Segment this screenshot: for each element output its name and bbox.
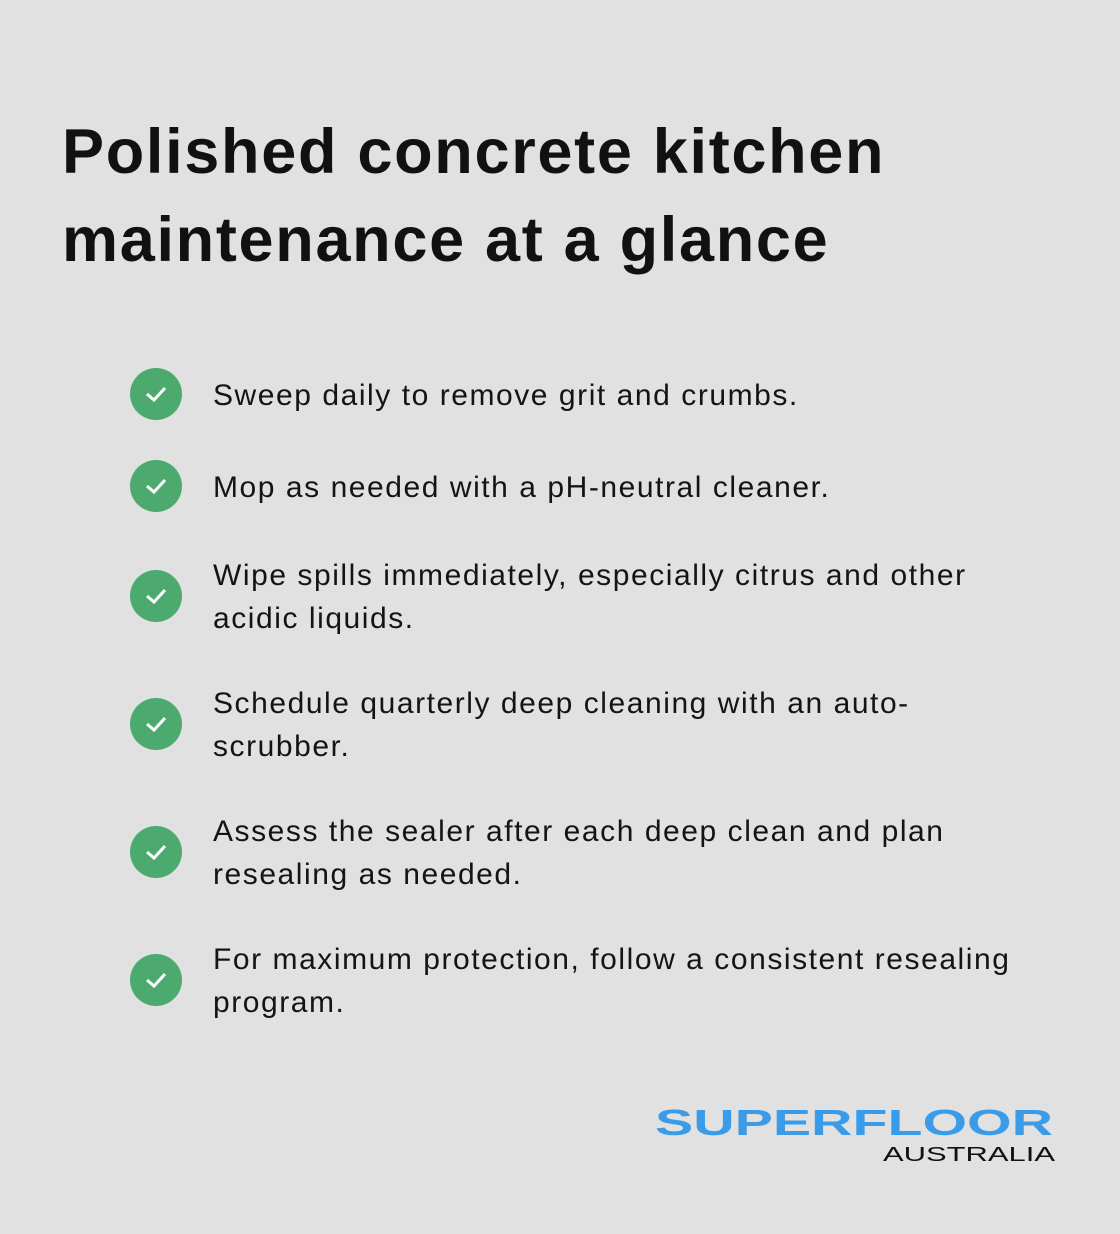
item 5: Assess the sealer after each deep clean and plan — [213, 815, 944, 848]
item 4 — [130, 687, 910, 763]
item 6: program. — [213, 986, 345, 1019]
logo: AUSTRALIA — [883, 1144, 1056, 1166]
item 6: For maximum protection, follow a consistent resealing — [213, 943, 1010, 976]
title — [62, 117, 885, 275]
item 5: resealing as needed. — [213, 858, 523, 891]
title: Polished concrete kitchen — [62, 117, 885, 187]
item 3: Wipe spills immediately, especially citrus and other — [213, 559, 967, 592]
item 6 — [130, 943, 1010, 1019]
item 2 — [130, 460, 830, 512]
logo — [655, 1102, 1056, 1166]
item 5 — [130, 815, 944, 891]
title: maintenance at a glance — [62, 205, 829, 275]
item 3: acidic liquids. — [213, 602, 415, 635]
item 4: Schedule quarterly deep cleaning with an auto- — [213, 687, 910, 720]
item 2: Mop as needed with a pH-neutral cleaner. — [213, 471, 830, 504]
logo: SUPERFLOOR — [655, 1102, 1053, 1143]
item 3 — [130, 559, 967, 635]
item 1 — [130, 368, 799, 420]
item 1: Sweep daily to remove grit and crumbs. — [213, 379, 799, 412]
item 4: scrubber. — [213, 730, 350, 763]
